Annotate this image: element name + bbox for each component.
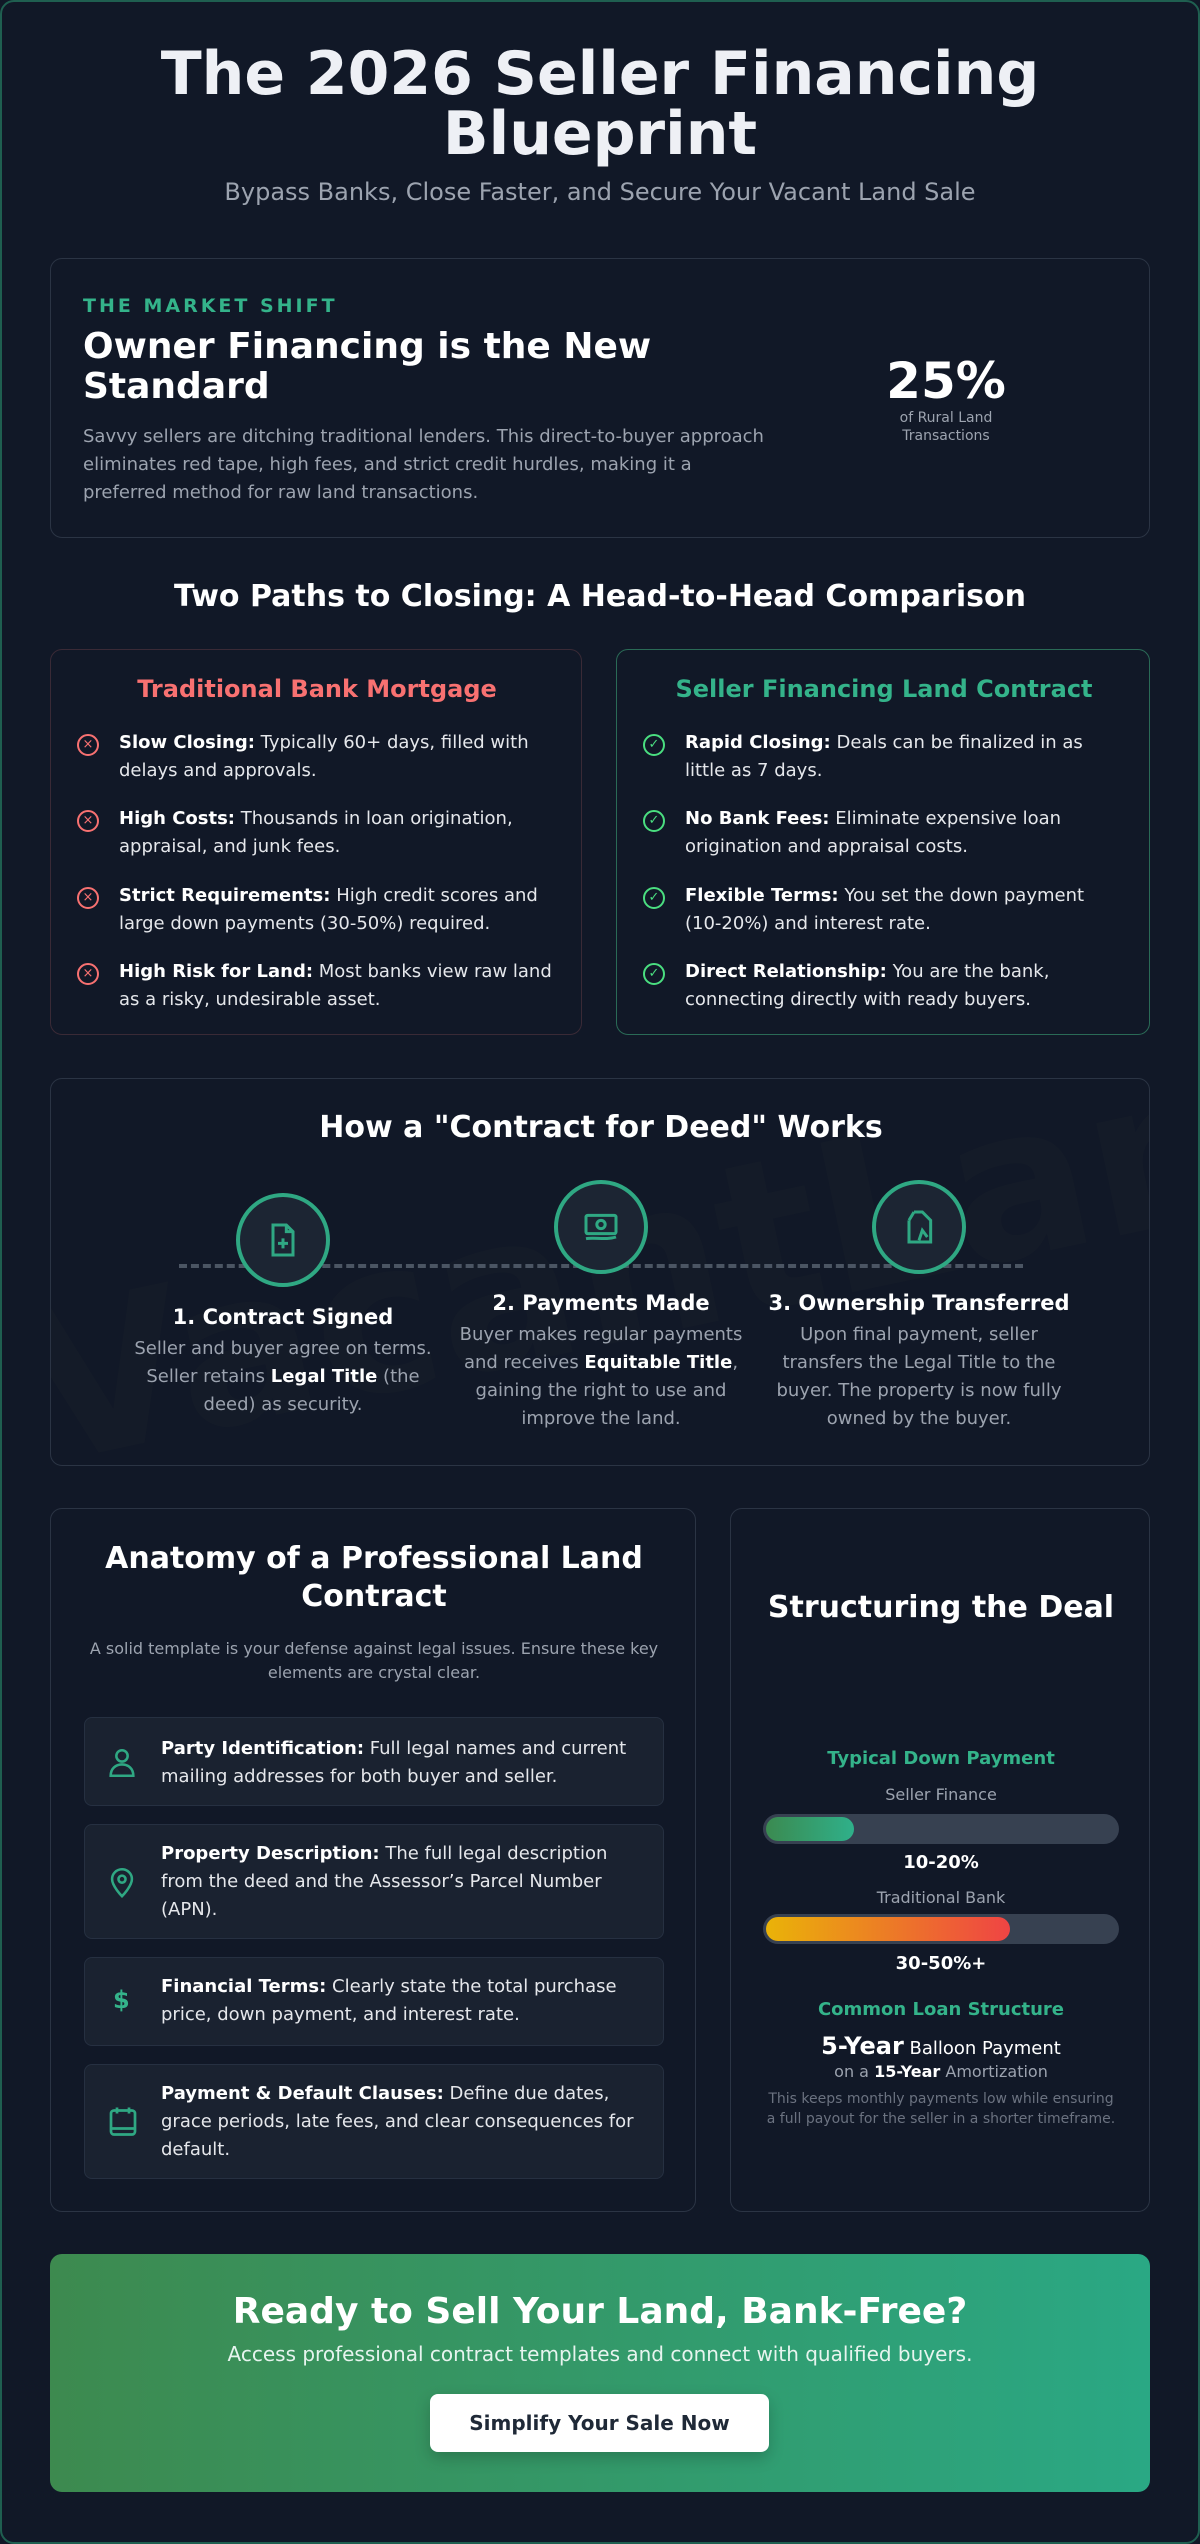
bar chart: down payments: Traditional Bank <box>877 1888 1005 1907</box>
panel: structuring the deal <box>730 1508 1150 2212</box>
list: seller pros: Flexible Terms: You set the down payment (10-20%) and interest rate. <box>685 885 1084 934</box>
list: bank cons <box>77 732 552 1010</box>
label: the market shift: THE MARKET SHIFT <box>83 295 338 317</box>
cta subtext: Access professional contract templates and connect with qualified buyers. <box>228 2342 972 2366</box>
icon: money <box>554 1180 648 1274</box>
step 3: 3. Ownership Transferred <box>768 1291 1070 1315</box>
loan structure: This keeps monthly payments low while ensuring a full payout for the seller in a shorter timeframe. <box>767 2091 1115 2127</box>
panel: how contract for deed works <box>50 1078 1150 1466</box>
list: seller pros: ✓ <box>649 813 659 828</box>
step 2: 2. Payments Made <box>492 1291 710 1315</box>
loan structure <box>767 1999 1115 2127</box>
step 2: Buyer makes regular payments and receives Equitable Title, gaining the right to use and improve the land. <box>460 1324 742 1429</box>
panel: market shift <box>50 258 1150 538</box>
loan structure: Common Loan Structure <box>818 1999 1064 2020</box>
icon: deed transfer <box>872 1180 966 1274</box>
list: bank cons: High Risk for Land: Most banks view raw land as a risky, undesirable asset. <box>119 961 552 1010</box>
cta heading: Ready to Sell Your Land, Bank-Free? <box>233 2291 967 2332</box>
icon: document <box>236 1193 330 1287</box>
dashed line <box>179 1264 1023 1268</box>
panel: seller financing <box>616 649 1150 1035</box>
list: bank cons: × <box>83 737 93 752</box>
list: seller pros <box>643 732 1084 1010</box>
stat: 25%: of Rural Land <box>900 410 992 426</box>
subtitle: Bypass Banks, Close Faster, and Secure Your Vacant Land Sale <box>224 178 976 206</box>
heading: two paths: Two Paths to Closing: A Head-to-Head Comparison <box>174 579 1026 614</box>
list: seller pros: Rapid Closing: Deals can be finalized in as little as 7 days. <box>685 732 1083 781</box>
list: bank cons: Slow Closing: Typically 60+ days, filled with delays and approvals. <box>119 732 529 781</box>
list: bank cons: High Costs: Thousands in loan origination, appraisal, and junk fees. <box>119 808 513 857</box>
item: financial terms: Financial Terms: Clearly state the total purchase price, down payment, and interest rate. <box>161 1976 617 2025</box>
intro text: A solid template is your defense against legal issues. Ensure these key elements are crystal clear. <box>90 1639 658 1682</box>
item: party identification: Party Identification: Full legal names and current mailing addresses for both buyer and seller. <box>161 1738 626 1787</box>
title: Blueprint <box>443 99 757 169</box>
bar chart: down payments: Seller Finance <box>885 1785 997 1804</box>
item: property description: Property Description: The full legal description from the deed and the Assessor’s Parcel Number (APN). <box>161 1843 607 1920</box>
item: financial terms <box>84 1957 664 2046</box>
item: financial terms: $ <box>113 1986 130 2014</box>
list: seller pros: Direct Relationship: You are the bank, connecting directly with ready buyers. <box>685 961 1049 1010</box>
list: bank cons: Strict Requirements: High credit scores and large down payments (30-50%) required. <box>119 885 538 934</box>
bar chart: down payments: 30-50%+ <box>896 1953 986 1974</box>
stat: 25%: 25% <box>886 352 1006 410</box>
list: seller pros: No Bank Fees: Eliminate expensive loan origination and appraisal costs. <box>685 808 1061 857</box>
bar chart: down payments: 10-20% <box>903 1852 979 1873</box>
list: bank cons: × <box>83 813 93 828</box>
heading: Structuring the Deal <box>768 1590 1114 1625</box>
list: seller pros: ✓ <box>649 890 659 905</box>
panel: call to action <box>50 2254 1150 2492</box>
panel: anatomy <box>50 1508 696 2212</box>
list: seller pros: ✓ <box>649 966 659 981</box>
label: typical down payment: Typical Down Payment <box>827 1748 1055 1769</box>
step 1: Seller and buyer agree on terms. Seller retains Legal Title (the deed) as security. <box>134 1338 432 1415</box>
button <box>430 2394 769 2452</box>
loan structure: 5-Year Balloon Payment <box>821 2032 1061 2060</box>
card title: Traditional Bank Mortgage <box>137 675 497 703</box>
loan structure: on a 15-Year Amortization <box>834 2062 1048 2081</box>
title <box>161 39 1039 169</box>
item: payment default clauses <box>84 2064 664 2179</box>
item: party identification <box>84 1717 664 1806</box>
card title: Seller Financing Land Contract <box>675 675 1093 703</box>
item: property description <box>84 1824 664 1939</box>
list: seller pros: ✓ <box>649 737 659 752</box>
list: bank cons: × <box>83 966 93 981</box>
panel: traditional bank <box>50 649 582 1035</box>
bar chart: down payments <box>763 1785 1119 1974</box>
item: payment default clauses: Payment & Default Clauses: Define due dates, grace periods, late fees, and clear consequences for default. <box>161 2083 634 2160</box>
step 1: 1. Contract Signed <box>173 1305 393 1329</box>
heading: Anatomy of a Professional Land Contract <box>105 1541 643 1614</box>
list: bank cons: × <box>83 890 93 905</box>
stat: 25%: Transactions <box>902 428 990 444</box>
step 3: Upon final payment, seller transfers the Legal Title to the buyer. The property is now fully owned by the buyer. <box>776 1324 1062 1429</box>
heading: Owner Financing is the New Standard <box>83 326 651 407</box>
stat: 25% <box>886 352 1006 444</box>
section title: How a "Contract for Deed" Works <box>319 1110 883 1145</box>
button: Simplify Your Sale Now <box>469 2411 730 2435</box>
paragraph: Savvy sellers are ditching traditional lenders. This direct-to-buyer approach eliminates red tape, high fees, and strict credit hurdles, making it a preferred method for raw land transactions. <box>83 426 764 503</box>
title: The 2026 Seller Financing <box>161 39 1039 109</box>
